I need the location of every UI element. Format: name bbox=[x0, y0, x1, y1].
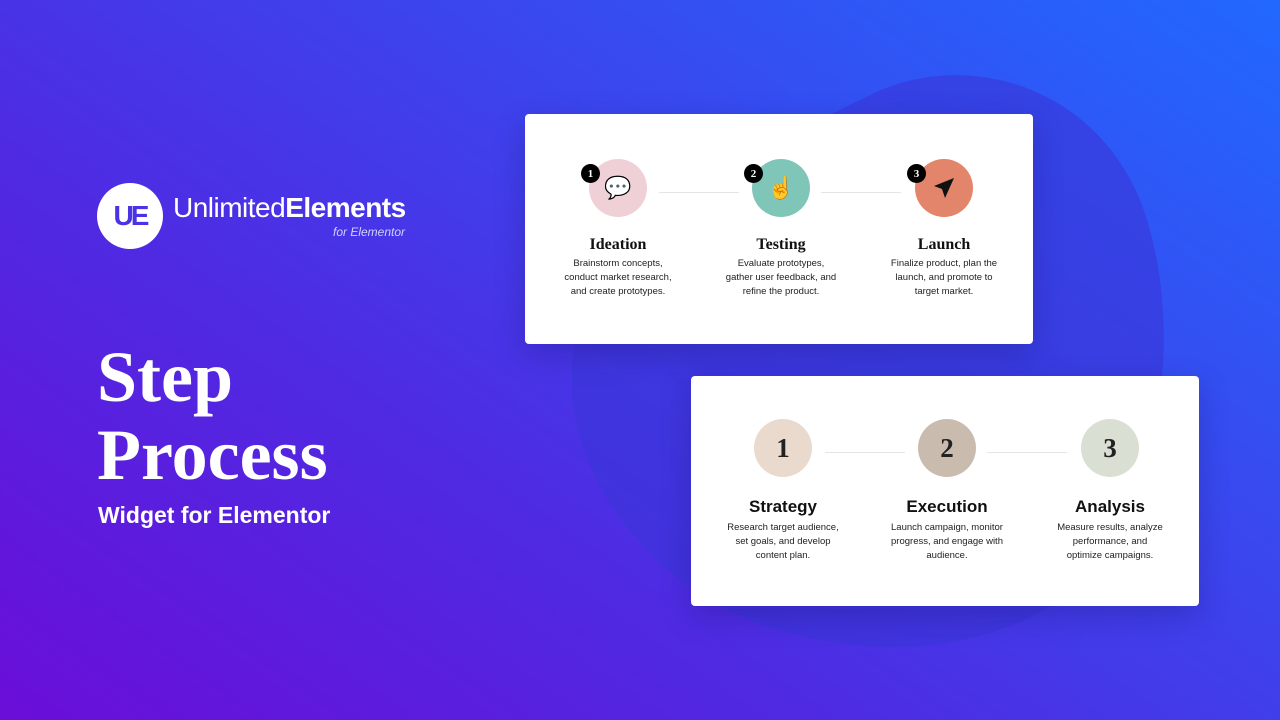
panel: card 2: Research target audience, bbox=[727, 522, 839, 533]
panel: card 1: Ideation bbox=[590, 236, 646, 253]
logo subtext: for Elementor bbox=[333, 225, 405, 239]
panel: card 1: 3 bbox=[914, 168, 919, 180]
step: Strategy bbox=[727, 419, 839, 561]
step: Launch bbox=[891, 159, 997, 297]
panel: card 2: progress, and engage with bbox=[891, 536, 1003, 547]
logo bbox=[97, 183, 406, 249]
panel: card 1: launch, and promote to bbox=[895, 272, 993, 283]
panel: card 2: Analysis bbox=[1075, 497, 1145, 516]
panel: card 2 bbox=[691, 376, 1199, 606]
panel: card 1: target market. bbox=[915, 286, 973, 297]
title: Step bbox=[97, 337, 233, 417]
panel: card 2: Launch campaign, monitor bbox=[891, 522, 1003, 533]
panel: card 1: Launch bbox=[918, 236, 970, 253]
step: Analysis bbox=[1057, 419, 1163, 561]
step: Execution bbox=[891, 419, 1003, 561]
panel: card 1: 💬 bbox=[604, 175, 632, 200]
subtitle: Widget for Elementor bbox=[98, 502, 330, 528]
panel: card 2: performance, and bbox=[1073, 536, 1147, 547]
title bbox=[97, 337, 328, 495]
panel: card 1: ☝ bbox=[767, 175, 795, 200]
step: Testing bbox=[726, 159, 836, 297]
panel: card 2: Execution bbox=[906, 497, 988, 516]
panel: card 1 bbox=[525, 114, 1033, 344]
panel: card 1: Brainstorm concepts, bbox=[573, 258, 663, 269]
step: Ideation bbox=[564, 159, 672, 297]
panel: card 1: 1 bbox=[588, 168, 593, 180]
panel: card 1: Finalize product, plan the bbox=[891, 258, 997, 269]
panel: card 1: 2 bbox=[751, 168, 756, 180]
panel: card 1: refine the product. bbox=[743, 286, 819, 297]
panel: card 2: audience. bbox=[926, 550, 968, 561]
logo text: UnlimitedElements bbox=[173, 192, 406, 223]
panel: card 2: 3 bbox=[1103, 432, 1117, 462]
panel: card 2: Strategy bbox=[749, 497, 817, 516]
icon: logo circle: UE bbox=[114, 200, 146, 231]
panel: card 2: 1 bbox=[776, 432, 790, 462]
panel: card 2: content plan. bbox=[756, 550, 810, 561]
panel: card 1: and create prototypes. bbox=[571, 286, 665, 297]
panel: card 1: Evaluate prototypes, bbox=[738, 258, 824, 269]
panel: card 1: gather user feedback, and bbox=[726, 272, 836, 283]
panel: card 2: optimize campaigns. bbox=[1067, 550, 1153, 561]
panel: card 2: Measure results, analyze bbox=[1057, 522, 1163, 533]
title: Process bbox=[97, 415, 328, 495]
icon: logo circle bbox=[97, 183, 163, 249]
panel: card 1: Testing bbox=[756, 236, 806, 253]
panel: card 2: 2 bbox=[940, 432, 954, 462]
panel: card 2: set goals, and develop bbox=[735, 536, 831, 547]
panel: card 1: conduct market research, bbox=[564, 272, 672, 283]
